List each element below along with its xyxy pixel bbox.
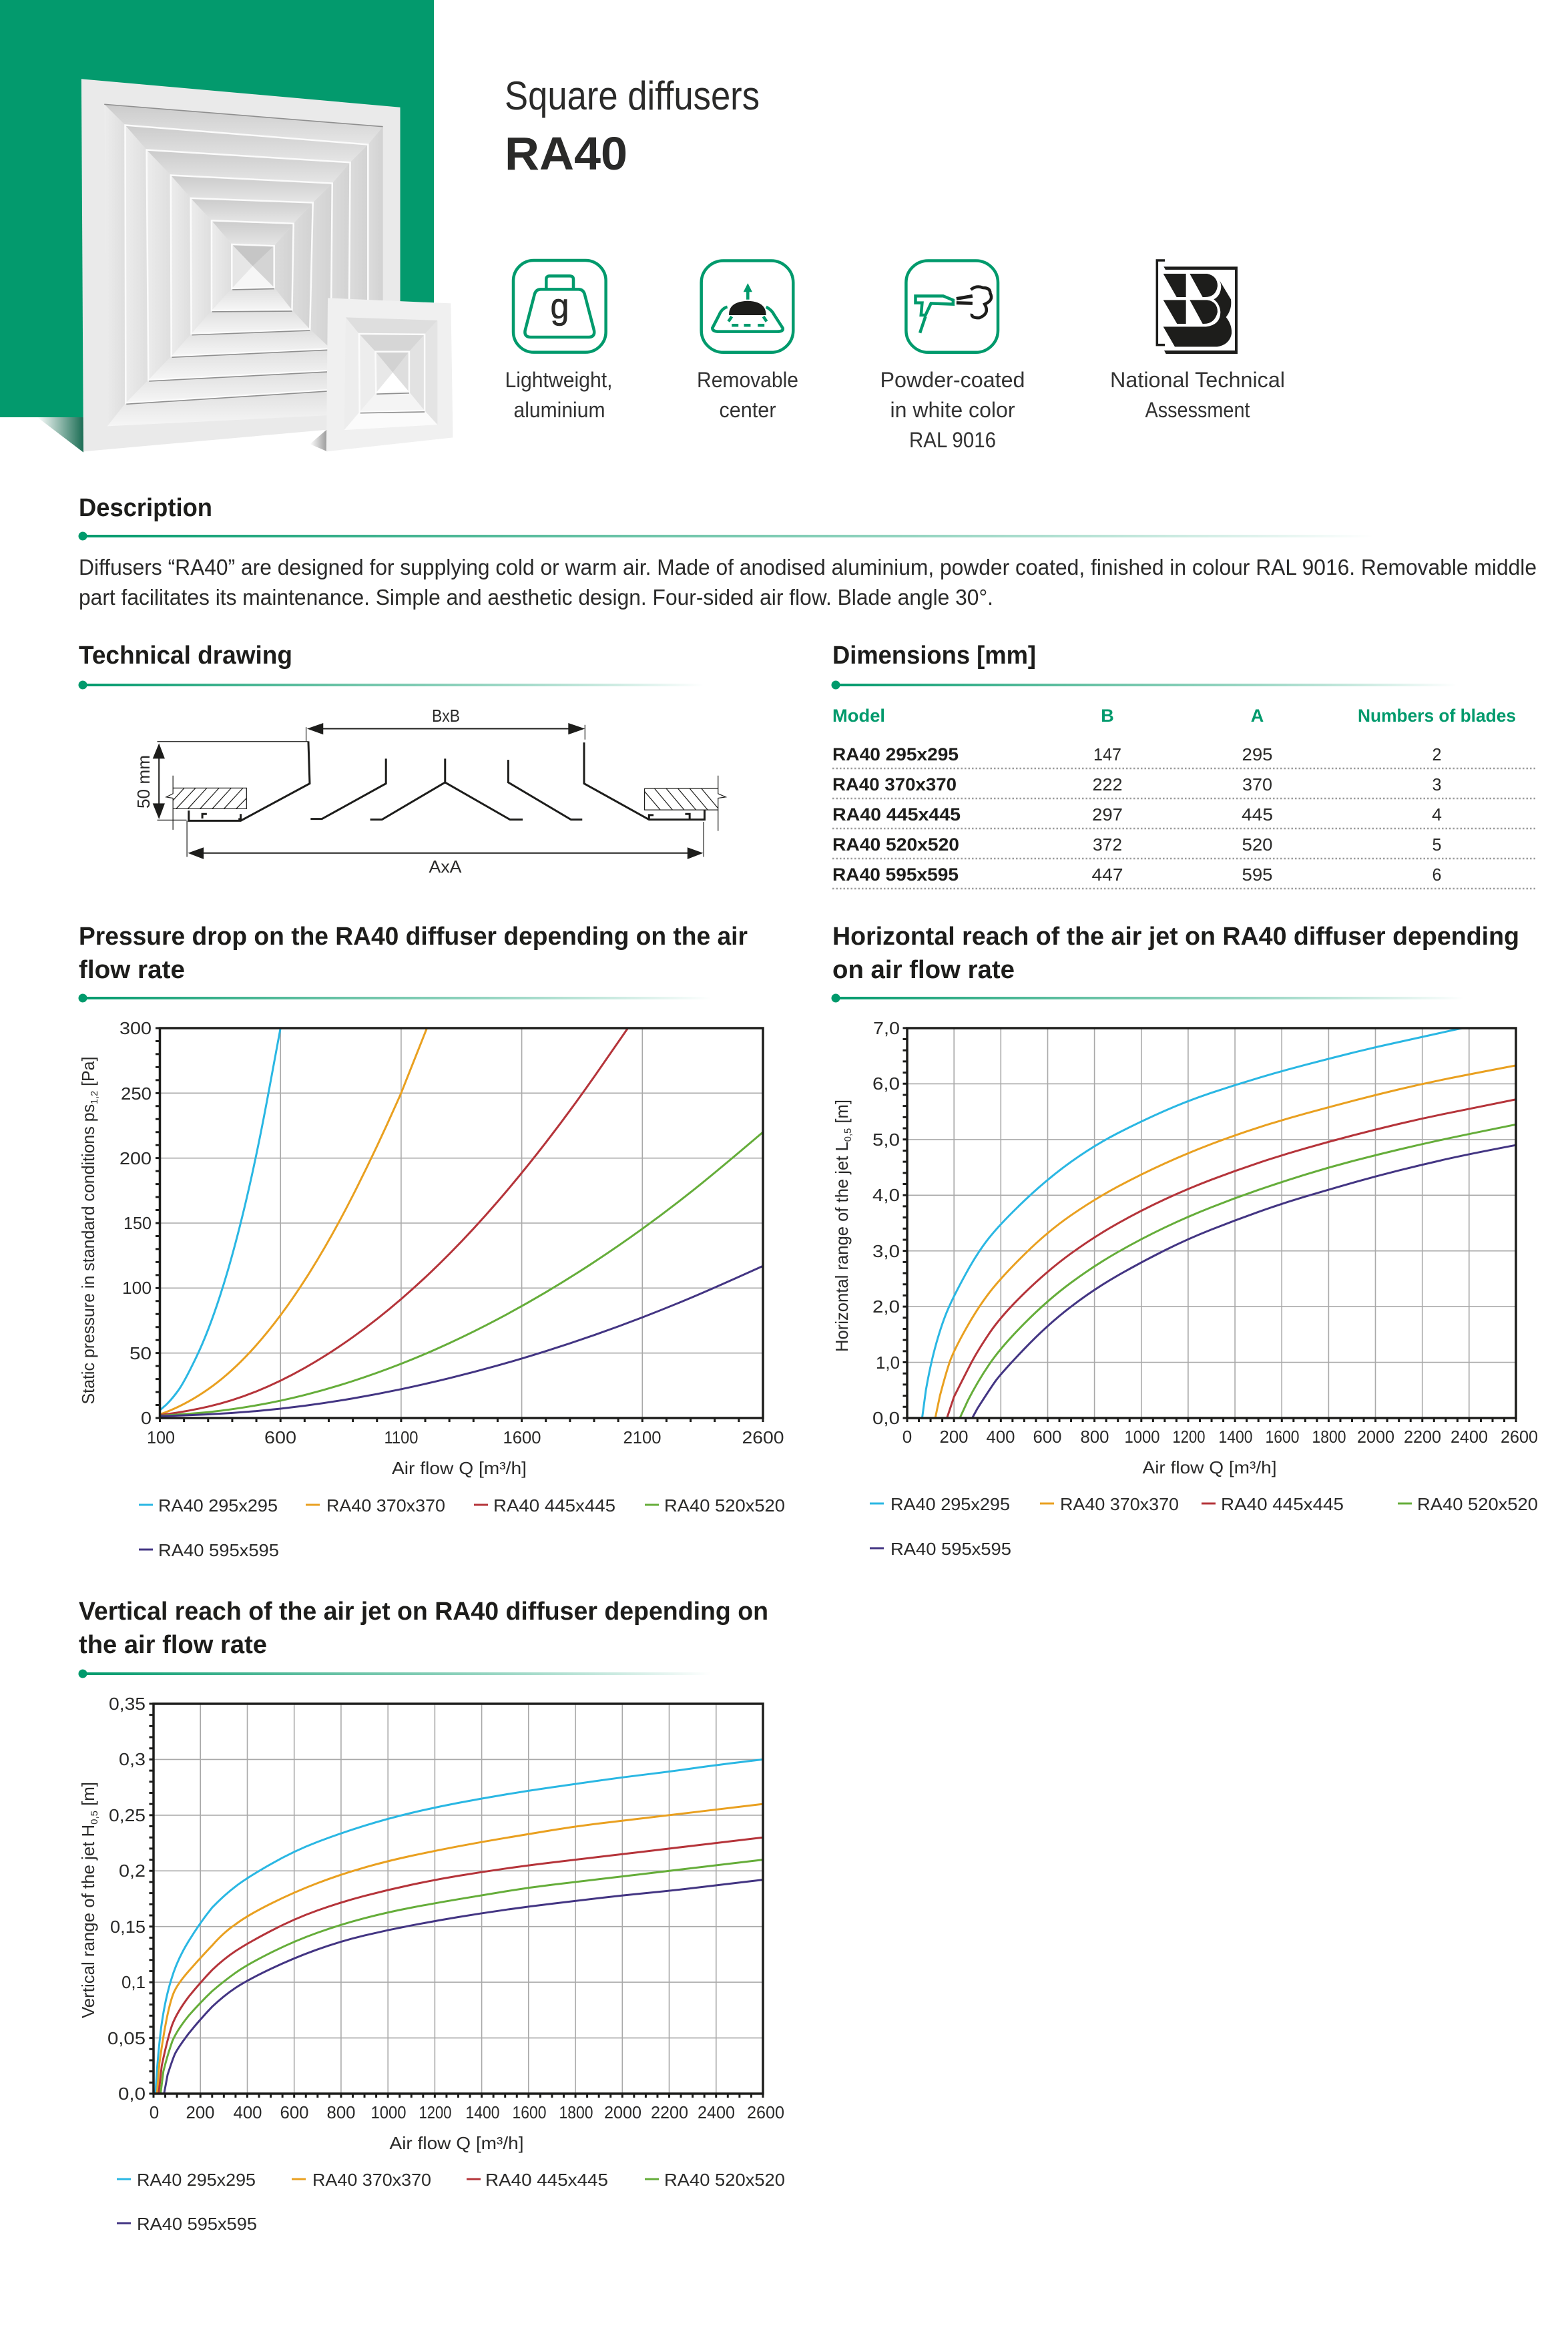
chart: vertical reach: 2200 <box>651 2102 688 2122</box>
dimensions table: RA40 295x295 <box>832 744 959 764</box>
chart: horizontal reach: 0,5 <box>842 1128 854 1142</box>
dimensions table: 4 <box>1432 804 1442 825</box>
chart: vertical reach: 2400 <box>698 2102 735 2122</box>
chart: vertical reach: 0,5 <box>89 1811 100 1825</box>
title <box>505 73 760 180</box>
dimensions table: 447 <box>1092 865 1123 885</box>
icon: removable center <box>702 260 793 353</box>
dimensions table: 370 <box>1242 774 1272 794</box>
curve: RA40 520x520 <box>960 1124 1516 1418</box>
icon caption: removable center: Removable <box>697 368 798 392</box>
curve: RA40 445x445 <box>160 1028 628 1415</box>
legend: horizontal reach: RA40 295x295 <box>890 1494 1010 1514</box>
dimensions table: 147 <box>1093 744 1121 764</box>
legend: vertical reach <box>117 2170 785 2234</box>
heading: technical drawing <box>79 642 704 689</box>
heading: pressure drop chart <box>79 923 748 1003</box>
curve: RA40 370x370 <box>160 1028 427 1415</box>
heading: horizontal reach chart: on air flow rate <box>832 956 1015 984</box>
heading: horizontal reach chart: Horizontal reach of the air jet on RA40 diffuser depending <box>832 923 1519 951</box>
chart: vertical reach: 800 <box>327 2102 355 2122</box>
description text <box>79 555 1537 610</box>
heading: vertical reach chart: Vertical reach of the air jet on RA40 diffuser depending on <box>79 1598 768 1626</box>
chart: horizontal reach: [m] <box>832 1100 852 1128</box>
icon caption: powder coated: RAL 9016 <box>909 428 996 452</box>
chart: horizontal reach: 1600 <box>1266 1427 1299 1447</box>
dimensions table: B <box>1101 706 1114 726</box>
chart: vertical reach: 1600 <box>513 2102 546 2122</box>
chart: horizontal reach: 1200 <box>1172 1427 1206 1447</box>
legend: horizontal reach: RA40 445x445 <box>1221 1494 1344 1514</box>
description text: Diffusers “RA40” are designed for supplying cold or warm air. Made of anodised aluminium, powder coated, finished in colour RAL 9016. Removable middle <box>79 555 1537 579</box>
legend: vertical reach: RA40 595x595 <box>137 2214 257 2234</box>
icon caption: lightweight: Lightweight, <box>505 368 613 392</box>
chart: horizontal reach: 1000 <box>1124 1427 1160 1447</box>
product photo: square diffusers <box>37 79 453 453</box>
legend: horizontal reach: RA40 595x595 <box>890 1539 1011 1559</box>
chart: vertical reach: 1400 <box>466 2102 499 2122</box>
curve: RA40 295x295 <box>160 1028 280 1410</box>
chart: vertical reach: 200 <box>186 2102 215 2122</box>
chart: vertical reach: 1200 <box>419 2102 451 2122</box>
chart: vertical reach: 0,35 <box>109 1694 146 1714</box>
dimensions table: 372 <box>1093 835 1122 855</box>
heading: description <box>79 494 1374 541</box>
dimensions table: 222 <box>1092 774 1123 794</box>
chart: vertical reach: Vertical range of the jet H <box>78 1823 98 2018</box>
heading: horizontal reach chart <box>832 923 1519 1003</box>
heading: technical drawing: Technical drawing <box>79 642 292 670</box>
curve: RA40 445x445 <box>159 1837 763 2094</box>
dimensions table: 6 <box>1432 865 1442 885</box>
technical drawing: 50 mm <box>134 755 154 808</box>
chart: pressure drop: 2600 <box>742 1427 784 1447</box>
icon caption: lightweight: aluminium <box>514 398 605 422</box>
chart: pressure drop: 150 <box>123 1213 152 1233</box>
icon: lightweight aluminium: g <box>550 286 569 326</box>
dimensions table: 2 <box>1432 744 1442 764</box>
dimensions table: RA40 370x370 <box>832 774 957 794</box>
icon caption: lightweight <box>505 368 613 422</box>
chart: horizontal reach: 4,0 <box>872 1185 900 1205</box>
chart: horizontal reach: 1,0 <box>876 1353 900 1373</box>
legend: vertical reach: RA40 445x445 <box>485 2170 608 2190</box>
dimensions table: 3 <box>1432 774 1442 794</box>
chart: horizontal reach: 3,0 <box>872 1241 900 1261</box>
heading: vertical reach chart <box>79 1598 768 1678</box>
icon caption: national technical assessment <box>1110 368 1285 422</box>
chart: pressure drop: 100 <box>147 1427 175 1447</box>
legend: horizontal reach: RA40 520x520 <box>1417 1494 1538 1514</box>
chart: vertical reach: [m] <box>78 1782 98 1811</box>
dimensions table: 297 <box>1092 804 1123 825</box>
icon caption: national technical assessment: National Technical <box>1110 368 1285 392</box>
chart: pressure drop: Air flow Q [m³/h] <box>392 1458 527 1478</box>
chart: horizontal reach: 0,0 <box>872 1408 900 1428</box>
icon caption: removable center: center <box>720 398 776 422</box>
chart: horizontal reach: 800 <box>1080 1427 1109 1447</box>
icon: ITB logo <box>1157 260 1238 354</box>
chart: horizontal reach: Air flow Q [m³/h] <box>1143 1457 1276 1477</box>
dimensions table: 595 <box>1242 865 1272 885</box>
heading: pressure drop chart: Pressure drop on the RA40 diffuser depending on the air <box>79 923 748 951</box>
legend: horizontal reach <box>870 1494 1538 1559</box>
heading: dimensions <box>832 642 1457 689</box>
chart: vertical reach: 0,15 <box>110 1917 146 1937</box>
chart: vertical reach: 0,25 <box>109 1805 146 1825</box>
chart: horizontal reach: 1800 <box>1312 1427 1346 1447</box>
chart: pressure drop: 1100 <box>384 1427 418 1447</box>
chart: horizontal reach: 2000 <box>1357 1427 1394 1447</box>
legend: pressure drop: RA40 445x445 <box>493 1495 615 1515</box>
technical drawing <box>134 706 726 877</box>
chart: pressure drop: 300 <box>119 1018 152 1038</box>
icon: lightweight aluminium <box>513 260 606 353</box>
dimensions table: Model <box>832 706 885 726</box>
legend: pressure drop: RA40 295x295 <box>158 1495 278 1515</box>
title: RA40 <box>505 128 627 180</box>
chart: vertical reach: 0,2 <box>119 1861 146 1881</box>
heading: dimensions: Dimensions [mm] <box>832 642 1036 670</box>
chart: horizontal reach: 2600 <box>1501 1427 1538 1447</box>
chart: pressure drop: Static pressure in standard conditions ps <box>78 1092 98 1405</box>
chart: vertical reach: 2000 <box>604 2102 641 2122</box>
chart: pressure drop: 1600 <box>503 1427 541 1447</box>
chart: horizontal reach: 600 <box>1033 1427 1061 1447</box>
chart: vertical reach: Air flow Q [m³/h] <box>390 2133 523 2153</box>
chart: vertical reach <box>78 1694 784 2153</box>
icon caption: powder coated: Powder-coated <box>880 368 1025 392</box>
chart: vertical reach: 600 <box>280 2102 308 2122</box>
dimensions table: 295 <box>1242 744 1272 764</box>
legend: pressure drop: RA40 520x520 <box>664 1495 785 1515</box>
curve: RA40 370x370 <box>157 1804 763 2094</box>
chart: horizontal reach: 6,0 <box>872 1074 900 1094</box>
curve: RA40 445x445 <box>947 1100 1516 1418</box>
legend: pressure drop: RA40 370x370 <box>326 1495 445 1515</box>
chart: horizontal reach: 1400 <box>1219 1427 1252 1447</box>
curve: RA40 595x595 <box>973 1145 1516 1418</box>
chart: vertical reach: 1800 <box>559 2102 593 2122</box>
chart: vertical reach: 0,3 <box>119 1749 146 1769</box>
heading: pressure drop chart: flow rate <box>79 956 185 984</box>
chart: vertical reach: 400 <box>234 2102 262 2122</box>
chart: vertical reach: 0,05 <box>107 2028 146 2048</box>
icon caption: removable center <box>697 368 798 422</box>
legend: vertical reach: RA40 295x295 <box>137 2170 256 2190</box>
chart: horizontal reach: 400 <box>987 1427 1015 1447</box>
technical drawing: BxB <box>432 706 460 726</box>
chart: vertical reach: 1000 <box>371 2102 406 2122</box>
chart: horizontal reach: 7,0 <box>873 1018 900 1038</box>
chart: vertical reach: 0,1 <box>121 1972 146 1992</box>
chart: horizontal reach: 2200 <box>1404 1427 1441 1447</box>
chart: pressure drop: [Pa] <box>78 1056 98 1091</box>
legend: vertical reach: RA40 520x520 <box>664 2170 785 2190</box>
chart: pressure drop <box>78 1018 784 1478</box>
chart: horizontal reach: 2400 <box>1451 1427 1488 1447</box>
dimensions table: 520 <box>1242 835 1272 855</box>
chart: pressure drop: 600 <box>264 1427 296 1447</box>
dimensions table: RA40 520x520 <box>832 835 959 855</box>
curve: RA40 295x295 <box>922 1028 1462 1418</box>
legend: pressure drop: RA40 595x595 <box>158 1540 279 1560</box>
legend: pressure drop <box>139 1495 785 1560</box>
chart: horizontal reach: 200 <box>940 1427 968 1447</box>
dimensions table: Numbers of blades <box>1358 706 1516 726</box>
curve: RA40 295x295 <box>156 1759 763 2094</box>
chart: vertical reach: 2600 <box>747 2102 784 2122</box>
legend: vertical reach: RA40 370x370 <box>312 2170 431 2190</box>
dimensions table <box>832 706 1537 889</box>
chart: pressure drop: 0 <box>141 1408 152 1428</box>
dimensions table: A <box>1251 706 1264 726</box>
chart: horizontal reach: 0 <box>902 1427 912 1447</box>
icon caption: national technical assessment: Assessment <box>1145 398 1250 422</box>
green header block <box>0 0 434 417</box>
chart: pressure drop: 2100 <box>623 1427 661 1447</box>
heading: vertical reach chart: the air flow rate <box>79 1631 267 1659</box>
title: Square diffusers <box>505 73 760 118</box>
dimensions table: 445 <box>1242 804 1273 825</box>
chart: pressure drop: 250 <box>121 1084 152 1104</box>
heading: description: Description <box>79 494 212 522</box>
chart: pressure drop: 200 <box>119 1148 152 1168</box>
dimensions table: RA40 445x445 <box>832 804 961 825</box>
description text: part facilitates its maintenance. Simple and aesthetic design. Four-sided air flow. Blade angle 30°. <box>79 585 993 610</box>
curve: RA40 370x370 <box>935 1066 1516 1418</box>
icon: powder coating spray <box>906 260 998 353</box>
dimensions table: RA40 595x595 <box>832 865 959 885</box>
chart: horizontal reach <box>832 1018 1538 1477</box>
technical drawing: AxA <box>429 857 462 877</box>
icon caption: powder coated <box>880 368 1025 452</box>
chart: horizontal reach: Horizontal range of the jet L <box>832 1139 852 1352</box>
curve: RA40 520x520 <box>161 1860 763 2094</box>
chart: horizontal reach: 5,0 <box>872 1130 900 1150</box>
icon caption: powder coated: in white color <box>890 398 1015 422</box>
dimensions table: 5 <box>1432 835 1442 855</box>
chart: pressure drop: 50 <box>129 1343 152 1363</box>
chart: pressure drop: 1,2 <box>89 1091 100 1104</box>
legend: horizontal reach: RA40 370x370 <box>1060 1494 1179 1514</box>
chart: vertical reach: 0,0 <box>118 2084 146 2104</box>
curve: RA40 595x595 <box>160 1266 763 1416</box>
chart: pressure drop: 100 <box>122 1278 152 1298</box>
chart: horizontal reach: 2,0 <box>872 1297 900 1317</box>
curve: RA40 595x595 <box>164 1880 763 2094</box>
curve: RA40 520x520 <box>160 1132 763 1415</box>
chart: vertical reach: 0 <box>150 2102 159 2122</box>
